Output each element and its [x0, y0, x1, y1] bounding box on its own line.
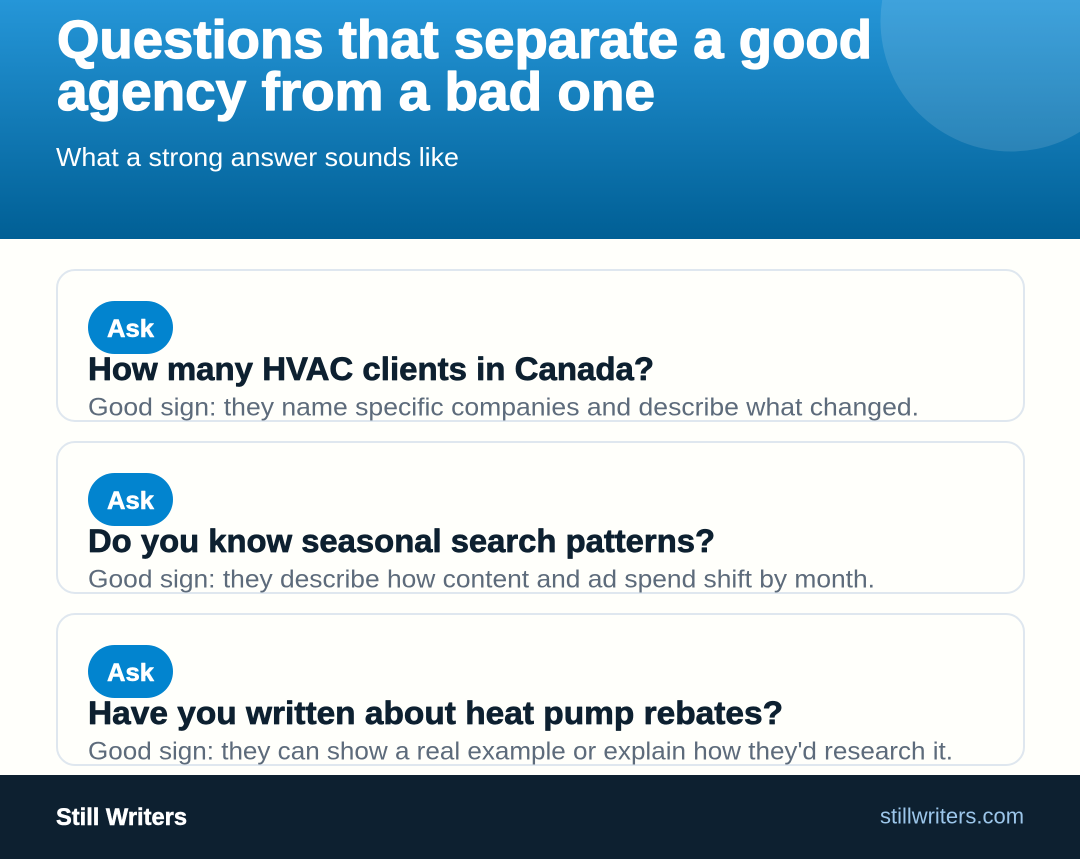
title: Questions that separate a good	[57, 10, 872, 70]
question heading: How many HVAC clients in Canada?	[88, 351, 654, 387]
badge: Ask	[88, 473, 173, 526]
header banner	[0, 0, 1080, 239]
subtitle: What a strong answer sounds like	[56, 142, 459, 172]
panel: question card 1	[57, 270, 1024, 422]
badge: Ask: Ask	[107, 315, 154, 343]
badge: Ask: Ask	[107, 487, 154, 515]
decorative circle	[880, 0, 1080, 152]
title	[57, 10, 872, 122]
footer bar	[0, 775, 1080, 859]
badge: Ask	[88, 301, 173, 354]
panel: question card 3	[57, 614, 1024, 766]
brand name: Still Writers	[56, 804, 187, 831]
question heading: Do you know seasonal search patterns?	[88, 523, 715, 559]
title: agency from a bad one	[57, 62, 655, 122]
question heading: Have you written about heat pump rebates?	[88, 695, 783, 731]
badge: Ask	[88, 645, 173, 698]
good sign text: Good sign: they can show a real example or explain how they'd research it.	[88, 738, 953, 766]
good sign text: Good sign: they name specific companies and describe what changed.	[88, 394, 919, 422]
website: stillwriters.com	[880, 804, 1024, 828]
badge: Ask: Ask	[107, 659, 154, 687]
panel: question card 2	[57, 442, 1024, 594]
good sign text: Good sign: they describe how content and ad spend shift by month.	[88, 566, 875, 594]
